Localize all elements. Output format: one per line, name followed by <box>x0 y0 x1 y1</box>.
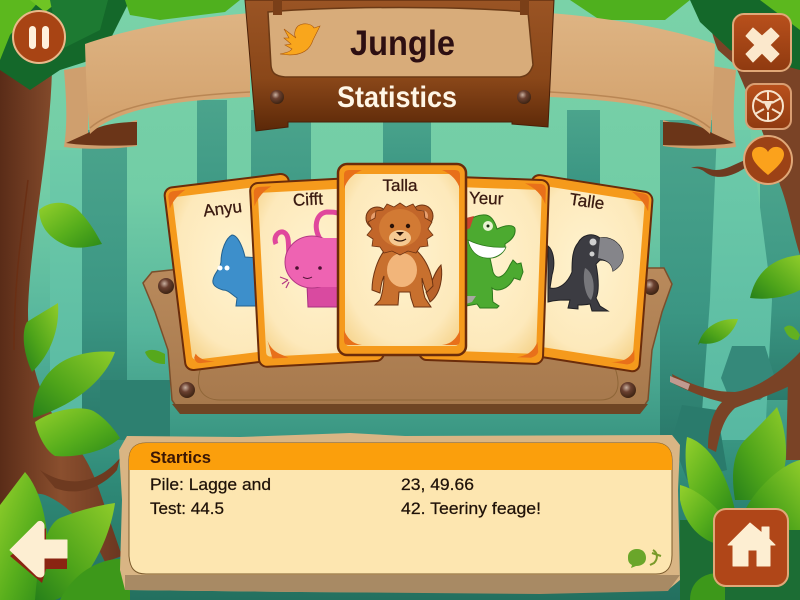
banner: left ribbon <box>64 13 250 149</box>
panel heading: Startics <box>150 448 211 467</box>
card: Talla <box>338 164 466 355</box>
leaves: bottom right cluster <box>680 407 800 600</box>
heading: Jungle: Jungle <box>350 24 455 63</box>
button: heart <box>744 136 792 184</box>
card: Cifft <box>250 177 384 367</box>
title plaque <box>245 0 554 131</box>
animal: blue creature <box>213 235 262 306</box>
banner: right ribbon <box>550 13 736 149</box>
card: Talle <box>518 174 653 372</box>
leaves: left cluster <box>24 303 120 456</box>
tree: right branches <box>670 0 800 460</box>
icon: green speech bubble and note <box>628 549 661 568</box>
card label: Talle <box>568 190 606 213</box>
button: wheel <box>746 84 791 129</box>
heading: Statistics: Statistics <box>337 81 457 114</box>
stat: values: 23, 49.66 <box>401 475 474 494</box>
tree: left trunk <box>0 70 122 562</box>
panel header bar <box>129 443 672 470</box>
plaque hangers <box>273 0 529 15</box>
rivet right <box>517 90 531 104</box>
foliage: top left canopy <box>0 0 240 90</box>
button: back arrow <box>10 521 67 583</box>
card label: Talla <box>383 176 418 195</box>
stat: Test: Test: 44.5 <box>150 499 224 518</box>
card label: Anyu <box>202 197 243 221</box>
wooden card board <box>143 268 672 414</box>
button: pause <box>13 11 65 63</box>
card: Yeur <box>419 176 549 364</box>
stat: note: 42. Teeriny feage! <box>401 499 541 518</box>
card label: Yeur <box>469 188 504 209</box>
stat: Pile: Pile: Lagge and <box>150 475 271 494</box>
leaf: left floating <box>39 203 102 248</box>
animal: black creature <box>548 235 623 311</box>
icon: orange bird <box>280 24 320 55</box>
animal: lion cub <box>366 203 442 307</box>
animal: pink creature <box>275 212 340 307</box>
button: home <box>714 509 788 586</box>
leaves: bottom left cluster <box>0 472 130 600</box>
leaves: right floating <box>145 255 800 364</box>
card: Anyu <box>164 173 310 371</box>
foliage: top right canopy <box>570 0 800 70</box>
rivets <box>158 278 659 398</box>
button: close <box>733 14 791 71</box>
card label: Cifft <box>292 189 324 210</box>
stats panel <box>119 433 680 594</box>
rivet left <box>270 90 284 104</box>
animal: green crocodile <box>466 215 523 308</box>
